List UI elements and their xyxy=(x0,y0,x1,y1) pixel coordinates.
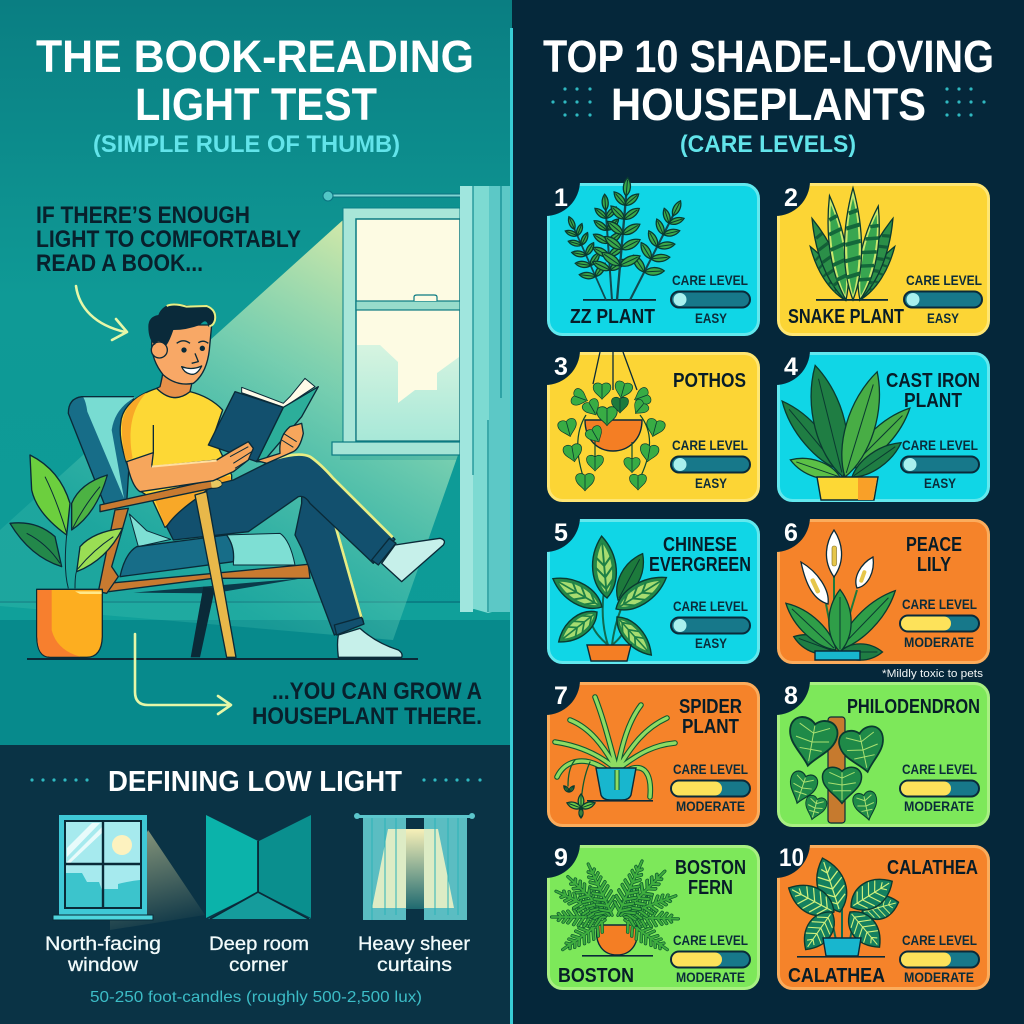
plant icon xyxy=(557,352,666,491)
card 1: ZZ plant xyxy=(545,176,758,334)
card 4: cast iron plant: 4 xyxy=(784,353,798,381)
labels: low light conditions xyxy=(45,933,471,976)
card 8: philodendron: PHILODENDRON xyxy=(847,696,980,718)
plant icon xyxy=(784,715,889,823)
arm rest xyxy=(100,480,222,512)
light beam from window xyxy=(0,220,458,640)
plant icon xyxy=(774,362,917,500)
heading: book-reading light test xyxy=(36,31,474,158)
care bar: easy xyxy=(671,292,750,308)
book xyxy=(242,378,315,407)
panel: left background xyxy=(0,0,512,745)
card 3: pothos: 3 xyxy=(554,353,568,381)
panel: right background xyxy=(512,0,1024,1024)
card 4: cast iron plant: PLANT xyxy=(904,390,962,412)
arrow: to houseplant text xyxy=(135,634,231,714)
card 2: snake plant xyxy=(775,181,988,334)
heading: book-reading light test: LIGHT TEST xyxy=(135,79,377,130)
labels: low light conditions: North-facing xyxy=(45,933,161,955)
card 6: peace lily: LILY xyxy=(917,554,952,576)
text: if there's enough light xyxy=(36,202,301,277)
care bar: moderate xyxy=(900,952,979,968)
card 10: calathea xyxy=(775,843,988,988)
card 6: peace lily: PEACE xyxy=(906,534,962,556)
text: you can grow a houseplant there xyxy=(252,678,482,730)
card 3: pothos: CARE LEVEL xyxy=(672,437,748,453)
panel: defining low light background xyxy=(0,745,512,1024)
plant icon xyxy=(555,176,698,309)
card 4: cast iron plant: CARE LEVEL xyxy=(902,437,978,453)
card 9: boston fern xyxy=(545,843,758,988)
floor line xyxy=(27,658,418,660)
plant icon xyxy=(552,857,679,957)
card 1: ZZ plant: EASY xyxy=(695,310,728,326)
card 4: cast iron plant xyxy=(774,350,988,500)
plant icon xyxy=(805,188,900,303)
care bar: easy xyxy=(904,292,982,308)
care bar: easy xyxy=(671,618,750,634)
front chair leg xyxy=(195,492,236,657)
plant icon xyxy=(780,530,902,660)
text: if there's enough light: LIGHT TO COMFORTABLY xyxy=(36,226,301,253)
shirt xyxy=(120,388,232,527)
labels: low light conditions: curtains xyxy=(377,954,452,976)
card 7: spider plant: MODERATE xyxy=(676,798,745,814)
card 9: boston fern: MODERATE xyxy=(676,969,745,985)
card 9: boston fern: BOSTON xyxy=(675,857,746,879)
card 5: chinese evergreen: EASY xyxy=(695,635,728,651)
plant icon xyxy=(555,697,675,818)
illustration: reading person in chair xyxy=(68,303,444,657)
neck xyxy=(157,367,193,398)
socks xyxy=(382,538,444,582)
card 1: ZZ plant: 1 xyxy=(554,184,568,212)
card 9: boston fern: 9 xyxy=(554,844,568,872)
divider xyxy=(510,28,513,1024)
card 2: snake plant: 2 xyxy=(784,184,798,212)
labels: low light conditions: window xyxy=(67,954,139,976)
text: foot-candles note: 50-250 foot-candles (roughly 500-2,500 lux) xyxy=(90,989,422,1006)
face xyxy=(152,325,212,384)
heading: top 10 shade-loving houseplants: HOUSEPLANTS xyxy=(611,79,926,130)
text: if there's enough light: READ A BOOK... xyxy=(36,250,203,277)
far leg xyxy=(295,494,363,635)
arrow: to reader xyxy=(76,286,127,340)
card 5: chinese evergreen: 5 xyxy=(554,519,568,547)
icon: potted plant xyxy=(10,455,123,657)
icon: north-facing window xyxy=(53,815,205,930)
chair frame rear xyxy=(133,578,302,593)
labels: low light conditions: Heavy sheer xyxy=(358,933,471,955)
dotted accents xyxy=(30,778,482,782)
text: you can grow a houseplant there: ...YOU CAN GROW A xyxy=(272,678,482,705)
hair xyxy=(148,303,215,345)
card 3: pothos: EASY xyxy=(695,475,728,491)
chair back xyxy=(68,397,133,510)
decorative dots around heading xyxy=(551,87,986,117)
card 7: spider plant: PLANT xyxy=(682,716,739,738)
far hand xyxy=(257,423,303,463)
card 4: cast iron plant: EASY xyxy=(924,475,957,491)
card 7: spider plant xyxy=(545,680,758,826)
card 6: peace lily xyxy=(775,517,988,662)
card 4: cast iron plant: CAST IRON xyxy=(886,370,980,392)
card 5: chinese evergreen: CHINESE xyxy=(663,534,737,556)
card 6: peace lily: 6 xyxy=(784,519,798,547)
care bar: moderate xyxy=(900,780,979,796)
card 10: calathea: MODERATE xyxy=(904,969,974,985)
card 1: ZZ plant: CARE LEVEL xyxy=(672,272,748,288)
card 3: pothos: POTHOS xyxy=(673,370,746,392)
card 5: chinese evergreen: CARE LEVEL xyxy=(673,598,748,614)
card 2: snake plant: SNAKE PLANT xyxy=(788,306,904,328)
icon: deep room corner xyxy=(206,815,311,919)
card 5: chinese evergreen: EVERGREEN xyxy=(649,554,751,576)
card 8: philodendron: 8 xyxy=(784,682,798,710)
card 5: chinese evergreen xyxy=(545,517,758,662)
card 10: calathea: CALATHEA xyxy=(887,857,978,879)
card 10: calathea: 10 xyxy=(779,844,804,872)
card 1: ZZ plant: ZZ PLANT xyxy=(570,306,655,328)
card 7: spider plant: 7 xyxy=(554,682,568,710)
note: toxicity: *Mildly toxic to pets xyxy=(882,668,984,680)
heading: defining low light: DEFINING LOW LIGHT xyxy=(108,766,402,798)
care bar: moderate xyxy=(900,616,979,632)
text: if there's enough light: IF THERE’S ENOUGH xyxy=(36,202,250,229)
card 9: boston fern: BOSTON xyxy=(558,965,634,987)
heading: top 10 shade-loving houseplants: (CARE LEVELS) xyxy=(680,131,856,158)
card 2: snake plant: EASY xyxy=(927,310,960,326)
card 3: pothos xyxy=(545,350,758,500)
heading: top 10 shade-loving houseplants xyxy=(543,31,994,158)
curtain xyxy=(460,186,510,613)
card 9: boston fern: CARE LEVEL xyxy=(673,932,748,948)
heading: book-reading light test: THE BOOK-READING xyxy=(36,31,474,82)
care bar: moderate xyxy=(671,952,750,968)
card 9: boston fern: FERN xyxy=(688,877,733,899)
card 7: spider plant: CARE LEVEL xyxy=(673,761,748,777)
card 10: calathea: CALATHEA xyxy=(788,965,885,987)
card 8: philodendron: MODERATE xyxy=(904,798,974,814)
care bar: easy xyxy=(901,456,979,472)
care bar: moderate xyxy=(671,780,750,796)
care bar: easy xyxy=(671,456,750,472)
labels: low light conditions: corner xyxy=(229,954,289,976)
card 2: snake plant: CARE LEVEL xyxy=(906,272,982,288)
card 10: calathea: CARE LEVEL xyxy=(902,932,977,948)
arm and near hand xyxy=(127,442,253,492)
near leg xyxy=(167,455,395,563)
text: you can grow a houseplant there: HOUSEPLANT THERE. xyxy=(252,703,482,730)
plant icon xyxy=(783,854,902,958)
icon: heavy sheer curtains xyxy=(354,813,475,920)
labels: low light conditions: Deep room xyxy=(209,933,309,955)
scene: room floor xyxy=(0,601,510,745)
curtain rod xyxy=(323,191,462,201)
card 8: philodendron xyxy=(775,680,988,826)
window xyxy=(332,208,460,460)
card 7: spider plant: SPIDER xyxy=(679,696,742,718)
card 6: peace lily: MODERATE xyxy=(904,634,974,650)
card 6: peace lily: CARE LEVEL xyxy=(902,596,977,612)
heading: book-reading light test: (SIMPLE RULE OF THUMB) xyxy=(93,131,400,158)
card 8: philodendron: CARE LEVEL xyxy=(902,761,977,777)
cushions xyxy=(223,533,295,565)
plant icon xyxy=(548,535,672,661)
